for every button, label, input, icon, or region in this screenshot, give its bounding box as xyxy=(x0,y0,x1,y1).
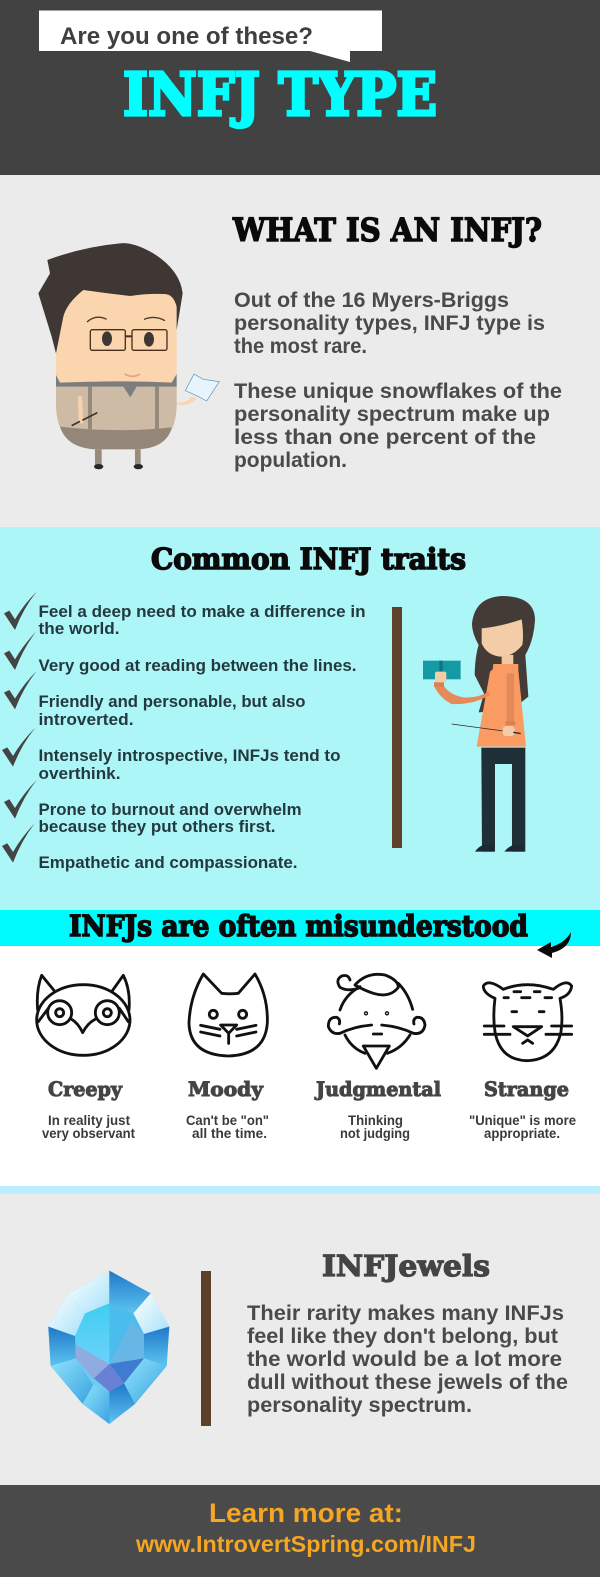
text block: definition xyxy=(234,289,562,472)
caption xyxy=(186,1112,269,1141)
item: strange xyxy=(469,983,576,1141)
text block: traits list: Prone to burnout and overwhelm xyxy=(38,800,302,819)
text block: definition: personality spectrum make up xyxy=(234,403,550,426)
heading: misunderstood: INFJs are often misunderstood xyxy=(69,909,528,943)
caption: Thinking xyxy=(348,1112,403,1128)
panel: common traits xyxy=(0,527,600,910)
text block: jewels: the world would be a lot more xyxy=(247,1348,562,1371)
speech bubble: Are you one of these? xyxy=(60,23,313,50)
vertical bar xyxy=(392,607,402,848)
caption: not judging xyxy=(340,1125,410,1141)
text block: definition: the most rare. xyxy=(234,335,367,358)
text block: jewels: personality spectrum. xyxy=(247,1394,472,1417)
icon: tiger xyxy=(483,983,572,1061)
heading: INFJewels: INFJewels xyxy=(322,1249,490,1283)
text block: jewels: feel like they don't belong, but xyxy=(247,1325,558,1348)
icon: woman with book xyxy=(423,596,535,852)
text block: traits list: overthink. xyxy=(38,764,120,783)
heading: what is an INFJ: WHAT IS AN INFJ? xyxy=(232,211,542,249)
caption xyxy=(42,1112,135,1141)
text block: definition: population. xyxy=(234,449,347,472)
caption: very observant xyxy=(42,1125,135,1141)
caption xyxy=(469,1112,576,1141)
item: creepy xyxy=(37,975,135,1141)
icon: cat xyxy=(189,974,267,1056)
text block: traits list: Intensely introspective, INFJs tend to xyxy=(38,746,340,765)
text block: traits list: Friendly and personable, but also xyxy=(38,692,306,711)
label: Moody xyxy=(188,1077,264,1101)
icons: check marks xyxy=(2,592,37,863)
divider strip xyxy=(0,1186,600,1194)
text block: traits list: Feel a deep need to make a difference in xyxy=(38,602,366,621)
icon: owl xyxy=(37,975,130,1055)
text block: traits list: the world. xyxy=(38,619,120,638)
caption: In reality just xyxy=(48,1112,130,1128)
label: Strange xyxy=(484,1077,569,1101)
label: Creepy xyxy=(48,1077,123,1101)
icon: blue gem xyxy=(48,1271,169,1424)
caption: all the time. xyxy=(192,1125,267,1141)
text block: traits list xyxy=(38,602,366,872)
item: moody xyxy=(186,974,269,1141)
vertical bar xyxy=(201,1271,211,1426)
icon: man with moustache xyxy=(328,974,425,1068)
panel: header xyxy=(0,0,600,175)
text block: jewels: dull without these jewels of the xyxy=(247,1371,568,1394)
speech bubble xyxy=(39,10,382,62)
text block: traits list: Empathetic and compassionate. xyxy=(38,853,298,872)
title: INFJ TYPE xyxy=(123,60,437,129)
caption: appropriate. xyxy=(484,1125,560,1141)
text block: definition: Out of the 16 Myers-Briggs xyxy=(234,289,509,312)
text block: traits list: because they put others first. xyxy=(38,817,276,836)
text block: traits list: introverted. xyxy=(38,710,134,729)
text block: traits list: Very good at reading between the lines. xyxy=(38,656,356,675)
banner xyxy=(0,910,600,946)
footer url: www.IntrovertSpring.com/INFJ xyxy=(135,1531,476,1557)
panel: misunderstood xyxy=(0,909,600,1186)
caption: Can't be "on" xyxy=(186,1112,269,1128)
text block: definition: personality types, INFJ type is xyxy=(234,312,545,335)
panel: what is an INFJ xyxy=(0,175,600,527)
text block: definition: These unique snowflakes of the xyxy=(234,380,562,403)
text block: jewels xyxy=(247,1302,568,1417)
panel: footer xyxy=(0,1485,600,1577)
footer heading: Learn more at: xyxy=(209,1498,403,1528)
caption: "Unique" is more xyxy=(469,1112,576,1128)
text block: definition: less than one percent of the xyxy=(234,426,536,449)
arrow xyxy=(537,932,571,958)
icon: man with glasses and book xyxy=(38,243,219,469)
caption xyxy=(340,1112,410,1141)
item: judgmental xyxy=(314,974,441,1141)
panel: INFJewels xyxy=(0,1194,600,1485)
text block: jewels: Their rarity makes many INFJs xyxy=(247,1302,564,1325)
label: Judgmental xyxy=(314,1077,441,1101)
heading: common INFJ traits: Common INFJ traits xyxy=(151,542,466,576)
